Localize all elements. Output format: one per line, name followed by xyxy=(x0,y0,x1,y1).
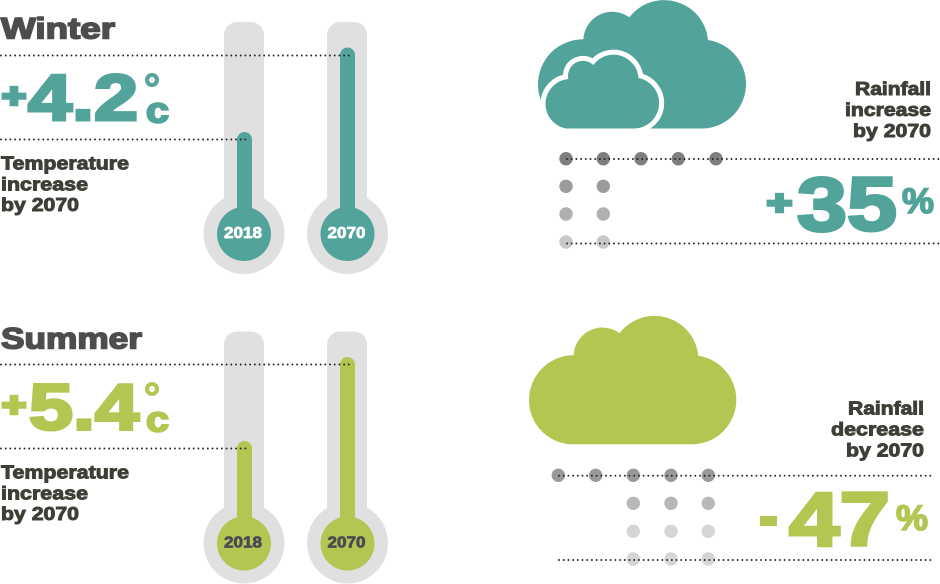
label: rainfall decrease: Rainfall xyxy=(848,398,924,418)
icon: cloud xyxy=(529,316,736,444)
thermometer: 2018 summer: 2018 xyxy=(224,534,262,552)
heading: Winter: Winter xyxy=(1,12,115,46)
value: +4.2 degrees C: c xyxy=(146,90,169,130)
thermometer: 2018 winter xyxy=(204,22,284,274)
value: +35%: 35 xyxy=(797,162,897,248)
value: +5.4 degrees C xyxy=(2,370,169,444)
label: temperature increase xyxy=(1,462,129,524)
label: rainfall increase: Rainfall xyxy=(855,79,931,99)
panel: winter temperature xyxy=(1,12,388,274)
value: +4.2 degrees C: + xyxy=(2,77,26,114)
rain dots xyxy=(552,469,715,566)
value: -47%: 47 xyxy=(789,478,890,562)
thermometer: 2070 summer: 2070 xyxy=(328,534,366,552)
rain dots xyxy=(559,152,723,249)
heading: Summer: Summer xyxy=(1,322,142,356)
value: -47% xyxy=(760,478,928,562)
panel: summer temperature xyxy=(1,322,388,584)
value: +35%: % xyxy=(902,182,934,221)
thermometer: 2070 summer xyxy=(307,332,388,584)
label: temperature increase: Temperature xyxy=(1,154,129,174)
label: temperature increase: by 2070 xyxy=(1,195,79,215)
value: +5.4 degrees C: + xyxy=(2,386,26,423)
label: temperature increase: by 2070 xyxy=(1,504,79,524)
label: rainfall increase: increase xyxy=(845,100,931,120)
label: rainfall decrease xyxy=(831,398,924,460)
thermometer: 2018 winter: 2018 xyxy=(224,225,262,242)
thermometer: 2070 winter: 2070 xyxy=(328,225,366,242)
value: +35%: + xyxy=(767,184,792,221)
panel: summer rainfall xyxy=(529,316,932,566)
thermometer: 2070 winter xyxy=(307,22,388,274)
label: rainfall decrease: decrease xyxy=(831,420,924,440)
thermometer: 2018 summer xyxy=(204,332,284,584)
label: rainfall decrease: by 2070 xyxy=(846,440,924,460)
icon: double cloud xyxy=(530,0,746,134)
label: temperature increase: increase xyxy=(1,174,88,194)
value: +35% xyxy=(767,162,934,248)
value: +5.4 degrees C: c xyxy=(146,398,169,440)
label: rainfall increase xyxy=(845,79,931,141)
value: -47%: % xyxy=(896,499,928,538)
panel: winter rainfall xyxy=(530,0,940,249)
label: temperature increase: increase xyxy=(1,484,88,504)
value: +5.4 degrees C: 5.4 xyxy=(29,370,139,444)
label: rainfall increase: by 2070 xyxy=(853,121,931,141)
label: temperature increase xyxy=(1,154,129,215)
value: +4.2 degrees C xyxy=(2,61,169,134)
label: temperature increase: Temperature xyxy=(1,462,129,482)
value: +4.2 degrees C: 4.2 xyxy=(28,61,138,134)
